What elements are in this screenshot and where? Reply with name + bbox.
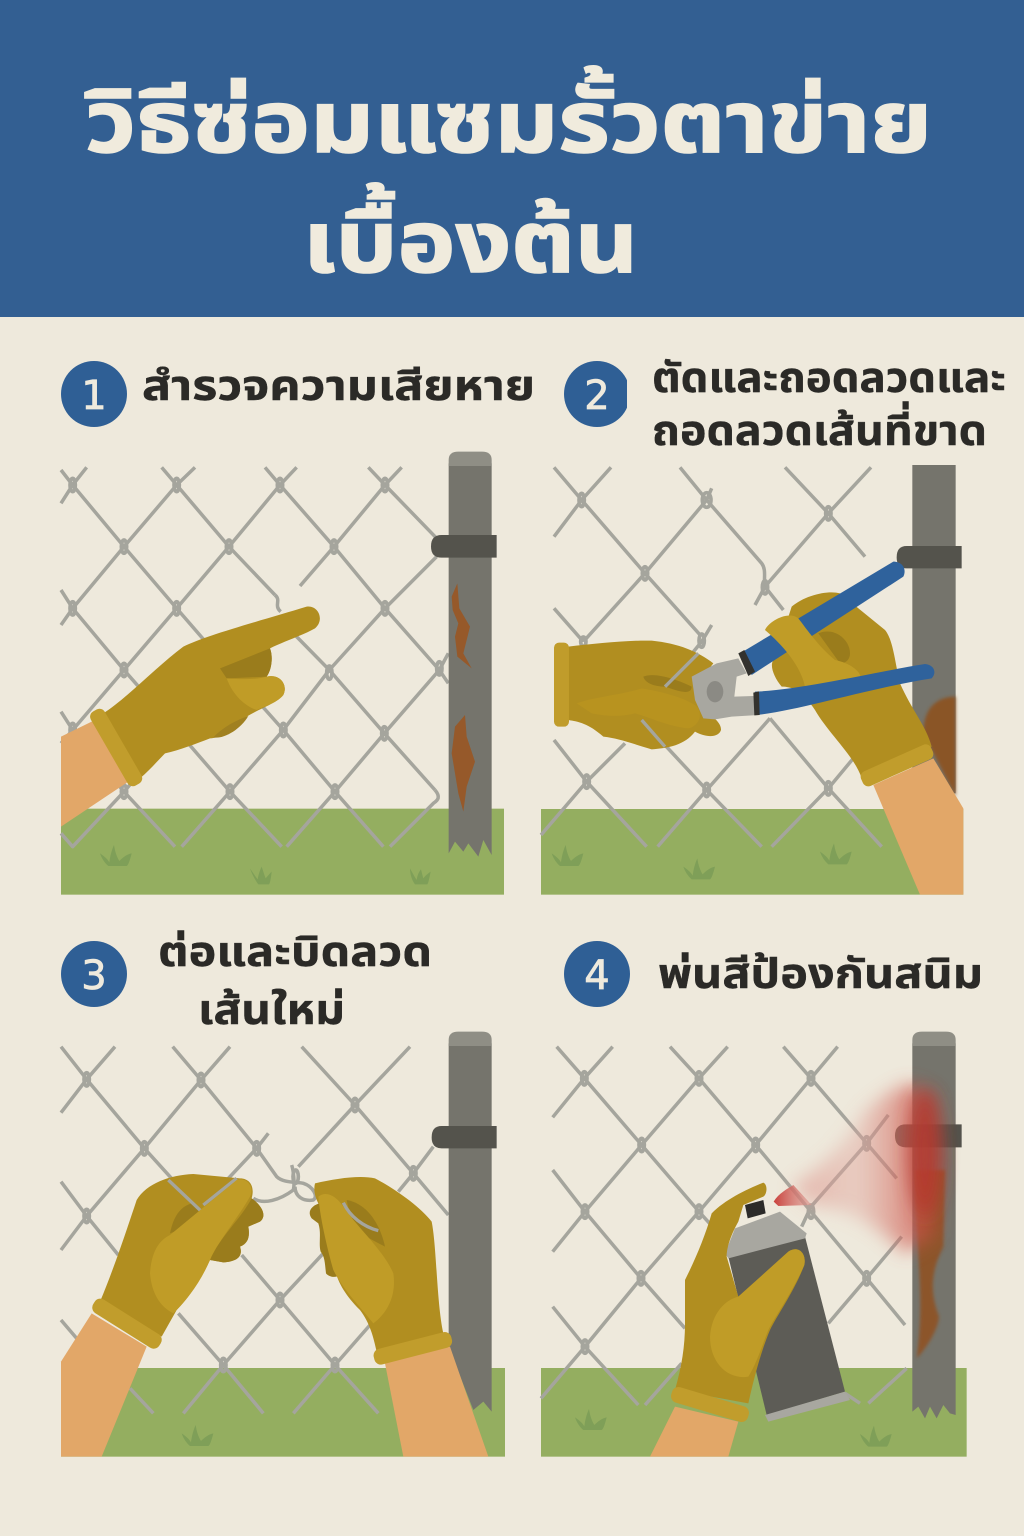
panel: step 1 inspect damage <box>61 452 504 895</box>
pointing glove <box>88 607 320 788</box>
fence post <box>897 465 962 797</box>
step 4 title: พ่นสีป้องกันสนิม <box>658 950 983 997</box>
chain-link mesh <box>541 467 882 847</box>
pliers <box>692 562 905 719</box>
right glove <box>772 592 935 788</box>
red spray cloud <box>774 1083 942 1253</box>
grass <box>61 809 504 895</box>
chain-link mesh <box>61 1047 448 1413</box>
panel: step 2 cut and remove wire <box>541 465 963 895</box>
number badge 1: 1 <box>81 373 107 419</box>
left glove <box>554 641 721 749</box>
spray can <box>725 1200 850 1422</box>
step 2 title line 2: ถอดลวดเส้นที่ขาด <box>652 401 987 454</box>
title line 2: เบื้องต้น <box>303 182 638 291</box>
step 2 title line 1: ตัดและถอดลวดและ <box>652 354 1006 401</box>
number badge 1 <box>61 361 127 427</box>
number badge 2: 2 <box>584 373 610 419</box>
fence post <box>431 452 497 857</box>
title line 1: วิธีซ่อมแซมรั้วตาข่าย <box>84 65 932 171</box>
arm <box>873 758 963 895</box>
number badge 3 <box>61 941 127 1007</box>
step 1 title: สำรวจความเสียหาย <box>142 362 535 409</box>
grass <box>541 809 963 895</box>
fence post <box>895 1032 962 1418</box>
step 3 title line 1: ต่อและบิดลวด <box>158 928 432 975</box>
chain-link mesh <box>61 467 448 847</box>
fence post <box>432 1032 497 1412</box>
number badge 4 <box>564 941 630 1007</box>
left arm <box>61 1313 147 1457</box>
number badge 3: 3 <box>81 953 107 999</box>
step 2 heading <box>564 354 1006 454</box>
chain-link mesh <box>541 1047 907 1405</box>
left glove <box>90 1174 263 1351</box>
gripping thumb and lower handle <box>753 615 934 715</box>
panel: step 4 anti-rust spray <box>541 1032 967 1457</box>
number badge 2 <box>564 355 637 433</box>
header banner <box>0 0 1024 317</box>
step 3 heading <box>61 928 432 1033</box>
forearm <box>650 1407 738 1457</box>
step 3 title line 2: เส้นใหม่ <box>198 986 345 1033</box>
step 1 heading <box>61 361 535 427</box>
grass <box>541 1368 967 1457</box>
grass <box>61 1368 505 1457</box>
number badge 4: 4 <box>584 953 610 999</box>
arm <box>61 720 128 827</box>
panel: step 3 join and twist new wire <box>61 1032 505 1457</box>
right glove <box>310 1177 454 1366</box>
right arm <box>385 1347 488 1457</box>
step 4 heading <box>564 941 983 1007</box>
glove holding can <box>669 1183 805 1424</box>
